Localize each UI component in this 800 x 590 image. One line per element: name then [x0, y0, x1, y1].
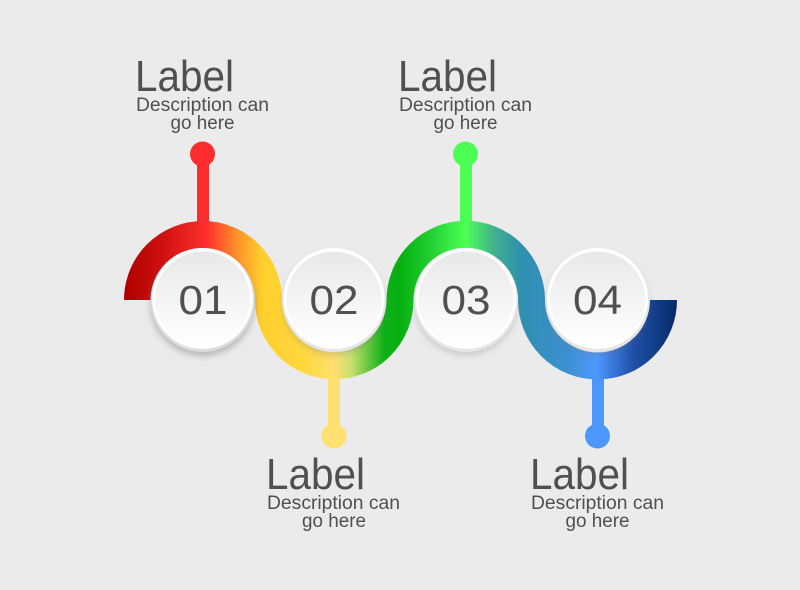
text block 02: Label: [266, 450, 365, 499]
text block 02: [266, 450, 400, 532]
text block 03: Description can: [399, 95, 532, 116]
text block 03: Label: [398, 52, 497, 101]
text block 01: go here: [170, 113, 234, 134]
text block 01: Description can: [136, 95, 269, 116]
text block 02: go here: [302, 511, 366, 532]
text block 04: Label: [530, 450, 629, 499]
wave ribbon: [138, 234, 664, 366]
step 03 disc: [414, 248, 518, 355]
text block 04: Description can: [531, 493, 664, 514]
text block 03: [398, 52, 532, 134]
text block 01: Label: [135, 52, 234, 101]
step 01 disc: [150, 248, 254, 356]
number 04: 04: [573, 277, 622, 323]
number 02: 02: [310, 277, 358, 323]
text block 04: [530, 450, 664, 532]
step 02 disc: [282, 248, 386, 355]
connector: stem 01: [190, 142, 215, 224]
number 03: 03: [442, 277, 490, 323]
text block 03: go here: [434, 113, 498, 134]
number 01: 01: [178, 277, 228, 323]
connector: stem 03: [453, 142, 478, 224]
text block 02: Description can: [267, 493, 400, 514]
connector: stem 04: [585, 374, 610, 448]
text block 04: go here: [566, 511, 630, 532]
connector: stem 02: [322, 374, 346, 448]
step 04 disc: [546, 248, 650, 355]
text block 01: [135, 52, 269, 134]
